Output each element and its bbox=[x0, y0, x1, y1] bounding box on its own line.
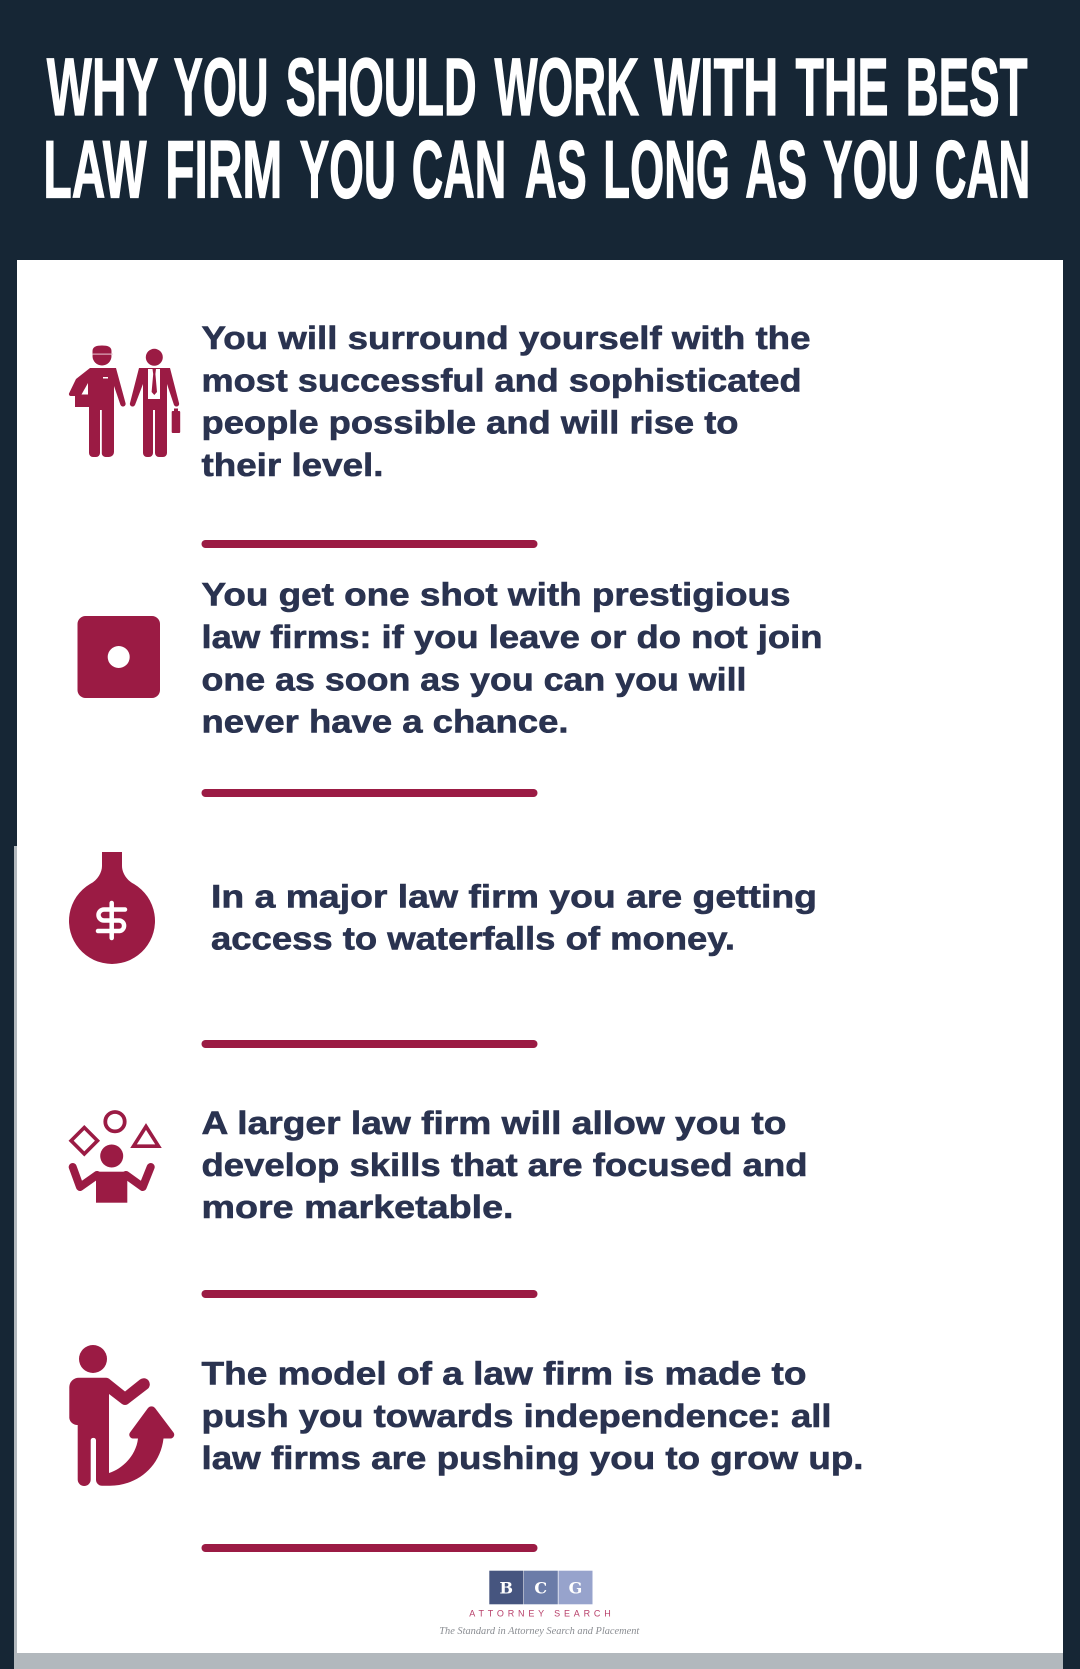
text block: point 2: never have a chance. bbox=[202, 704, 568, 740]
icon: money bag bbox=[69, 852, 155, 964]
divider bar 3 bbox=[202, 1040, 538, 1048]
text block: point 4 bbox=[202, 1105, 808, 1225]
title: SHOULD bbox=[286, 42, 477, 133]
text block: point 5: The model of a law firm is made to bbox=[202, 1356, 806, 1392]
text block: point 1 bbox=[202, 320, 810, 483]
text block: point 1: You will surround yourself with the bbox=[202, 320, 810, 356]
logo: BCG Attorney Search: C bbox=[534, 1578, 547, 1598]
logo: BCG Attorney Search: The Standard in Attorney Search and Placement bbox=[439, 1625, 640, 1637]
title: YOU bbox=[823, 124, 919, 216]
title: THE bbox=[796, 42, 888, 133]
title: YOU bbox=[300, 124, 396, 216]
logo: BCG Attorney Search: B bbox=[500, 1578, 513, 1598]
title: AS bbox=[525, 124, 587, 216]
icon: two professionals bbox=[69, 346, 180, 457]
text block: point 5: push you towards independence: all bbox=[202, 1398, 832, 1434]
divider bar 4 bbox=[202, 1290, 538, 1298]
divider bar 1 bbox=[202, 540, 538, 548]
title: FIRM bbox=[165, 124, 282, 216]
title: YOU bbox=[174, 42, 269, 133]
text block: point 3 bbox=[211, 878, 817, 956]
title: AS bbox=[745, 124, 807, 216]
text block: point 4: A larger law firm will allow you to bbox=[202, 1105, 786, 1141]
text block: point 5: law firms are pushing you to grow up. bbox=[202, 1440, 864, 1476]
divider bar 5 bbox=[202, 1544, 538, 1552]
text block: point 1: people possible and will rise to bbox=[202, 404, 738, 440]
text block: point 5 bbox=[202, 1356, 864, 1476]
text block: point 1: most successful and sophisticated bbox=[202, 362, 802, 398]
icon: dice bbox=[78, 616, 160, 698]
title: WITH bbox=[654, 42, 778, 133]
title: WHY bbox=[47, 42, 158, 133]
text block: point 3: access to waterfalls of money. bbox=[211, 920, 735, 956]
title: WORK bbox=[494, 42, 639, 133]
logo: BCG Attorney Search: G bbox=[569, 1578, 582, 1598]
text block: point 2: law firms: if you leave or do not join bbox=[202, 619, 822, 655]
title bbox=[43, 42, 1030, 216]
text block: point 3: In a major law firm you are getting bbox=[211, 878, 817, 914]
text block: point 2: one as soon as you can you will bbox=[202, 662, 746, 698]
icon: person with upward arrow bbox=[69, 1345, 174, 1486]
title: LONG bbox=[603, 124, 730, 216]
title: LAW bbox=[43, 124, 147, 216]
text block: point 2 bbox=[202, 576, 822, 740]
title: CAN bbox=[412, 124, 506, 216]
icon: juggling person bbox=[71, 1112, 158, 1203]
text block: point 2: You get one shot with prestigious bbox=[202, 576, 790, 612]
logo: BCG Attorney Search: ATTORNEY SEARCH bbox=[469, 1609, 611, 1619]
text block: point 4: more marketable. bbox=[202, 1189, 514, 1225]
text block: point 1: their level. bbox=[202, 447, 384, 483]
divider bar 2 bbox=[202, 789, 538, 797]
text block: point 4: develop skills that are focused and bbox=[202, 1147, 808, 1183]
logo: BCG Attorney Search bbox=[439, 1571, 640, 1637]
